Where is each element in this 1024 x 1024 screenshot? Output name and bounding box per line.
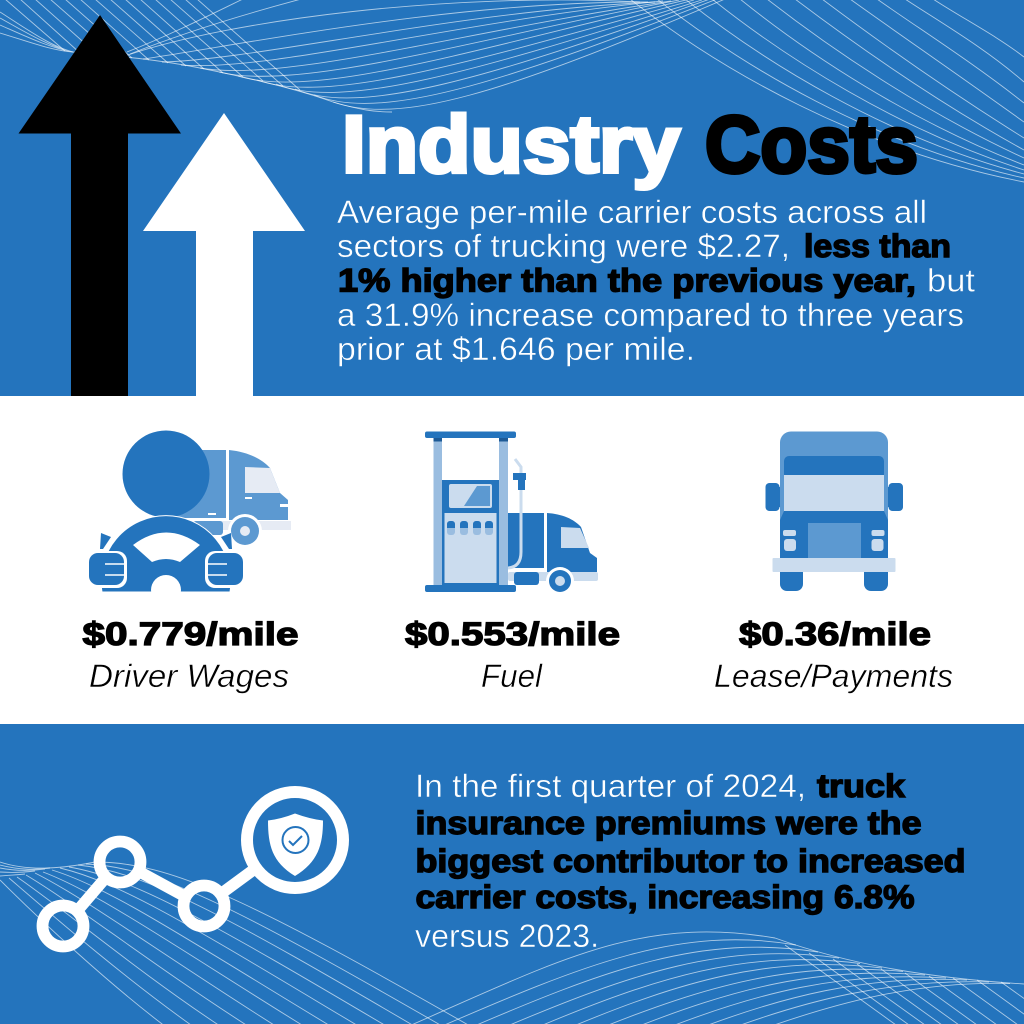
intro text block: a 31.9% increase compared to three years [337,297,964,333]
insurance text block: truck [817,768,905,804]
stat: driver wages: $0.779/mile [82,616,298,652]
panel: cost breakdown [0,396,1024,724]
stat: lease and payments: Lease/Payments [714,658,953,694]
icon: black up arrow [18,15,181,396]
icon: truck front view [766,432,903,591]
insurance text block: insurance premiums were the [416,805,922,841]
stat: driver wages [82,616,298,694]
icon: driver with truck [86,430,291,605]
intro text block: but [927,262,975,298]
intro text block: sectors of trucking were $2.27, [337,228,790,264]
title: Costs [705,100,918,190]
intro text block: 1% higher than the previous year, [338,262,916,298]
insurance text block: In the first quarter of 2024, [415,768,806,804]
icon: trend line with insurance shield [42,792,343,946]
stat: lease and payments: $0.36/mile [739,616,931,652]
title [342,100,918,190]
insurance text block: carrier costs, increasing 6.8% [416,879,914,915]
intro text block: prior at $1.646 per mile. [337,331,695,367]
icon: white up arrow [143,113,305,397]
insurance text block: versus 2023. [415,918,599,954]
stat: fuel: $0.553/mile [405,616,620,652]
stat: lease and payments [714,616,953,694]
insurance text block [415,768,966,954]
intro text block: less than [804,228,951,264]
stat: driver wages: Driver Wages [89,658,289,694]
title: Industry [342,100,680,190]
stat: fuel [405,616,620,694]
stat: fuel: Fuel [481,658,543,694]
insurance text block: biggest contributor to increased [416,843,966,879]
intro text block [337,194,975,367]
icon: fuel pump with truck [425,432,598,595]
intro text block: Average per-mile carrier costs across all [337,194,927,230]
